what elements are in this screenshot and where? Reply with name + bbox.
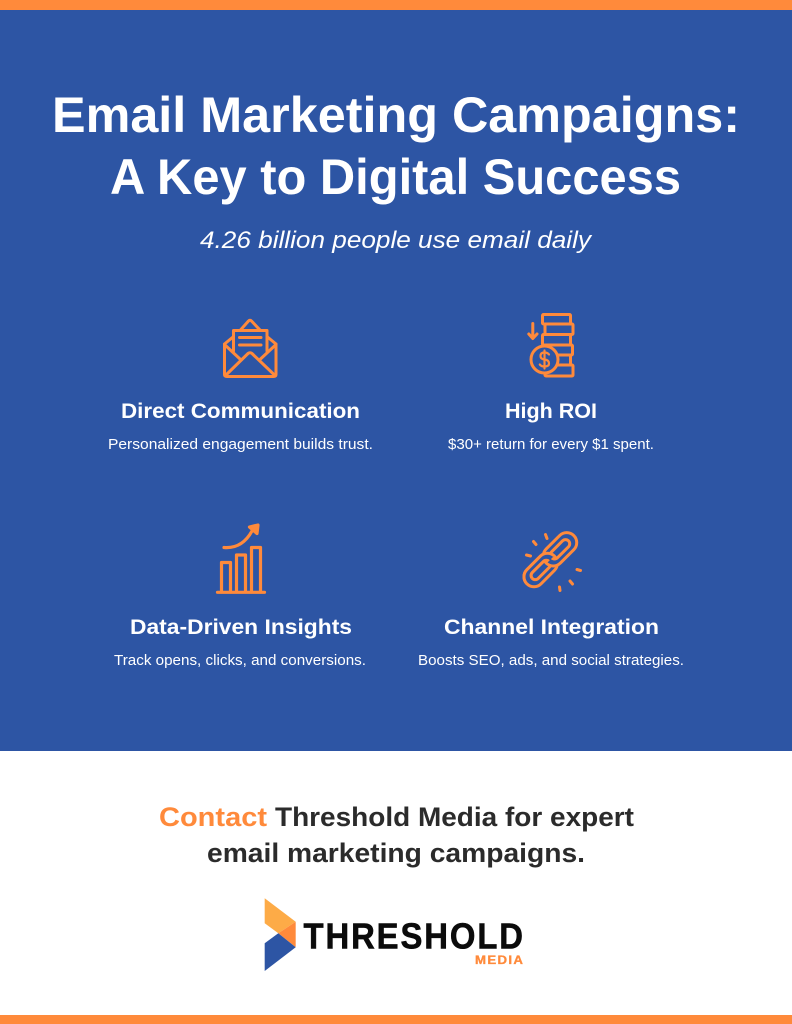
top orange bar: [0, 0, 792, 10]
description: Track opens, clicks, and conversions.: [114, 653, 366, 669]
logo: threshold media: [265, 898, 525, 971]
icon: open envelope: [224, 320, 276, 376]
description: Boosts SEO, ads, and social strategies.: [418, 653, 684, 669]
description: $30+ return for every $1 spent.: [448, 437, 654, 453]
call to action: Threshold Media for expert: [275, 802, 634, 832]
subtitle: 4.26 billion people use email daily: [200, 227, 593, 254]
bottom orange bar: [0, 1015, 792, 1024]
icon: chain link: [520, 528, 581, 591]
logo subtext: MEDIA: [475, 954, 524, 967]
call to action: email marketing campaigns.: [207, 838, 585, 868]
description: Personalized engagement builds trust.: [108, 437, 373, 453]
logo mark: [265, 898, 296, 971]
panel: data-driven insights: [114, 525, 366, 669]
panel: blue header background: [0, 0, 792, 751]
heading: Data-Driven Insights: [130, 616, 352, 639]
panel: direct communication: [108, 320, 373, 453]
icon: coin stack: [529, 314, 573, 376]
panel: channel integration: [418, 528, 684, 669]
call to action: Contact: [159, 802, 267, 832]
title: [52, 87, 740, 205]
heading: Direct Communication: [121, 400, 360, 423]
title: Email Marketing Campaigns:: [52, 87, 740, 143]
icon: bar chart with arrow: [218, 525, 264, 592]
panel: high roi: [448, 314, 654, 453]
title: A Key to Digital Success: [110, 149, 681, 205]
heading: Channel Integration: [444, 616, 659, 639]
heading: High ROI: [505, 400, 597, 423]
logo wordmark: THRESHOLD: [304, 917, 525, 957]
call to action: [159, 802, 634, 868]
